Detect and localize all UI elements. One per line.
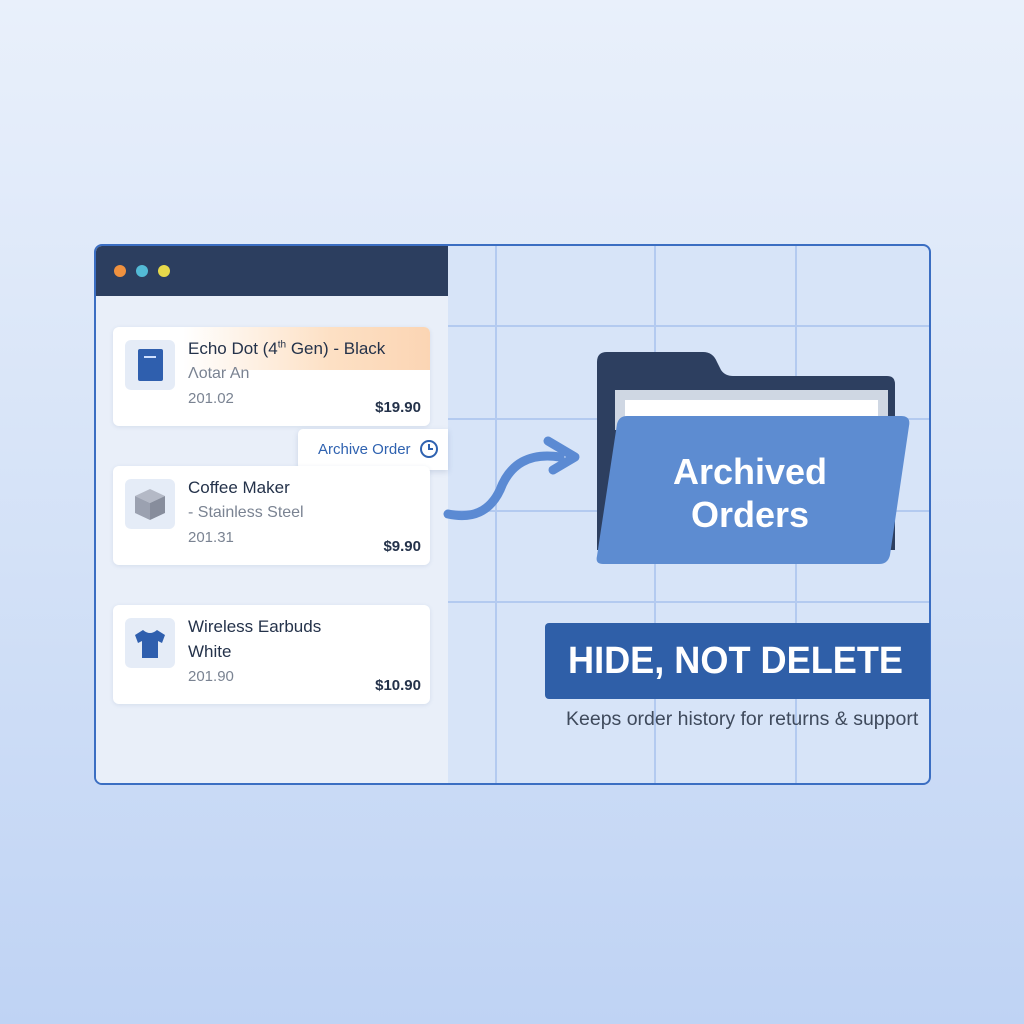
left panel (96, 246, 448, 787)
banner: HIDE, NOT DELETE (545, 623, 930, 699)
card: Coffee Maker: - Stainless Steel (188, 504, 304, 521)
icon: cube (125, 479, 175, 529)
card: Echo Dot: $19.90 (375, 399, 421, 416)
arrow (444, 436, 580, 520)
card: Echo Dot: Echo Dot (4th Gen) - Black (188, 339, 385, 358)
folder: Archived Orders: Archived Orders (673, 451, 827, 535)
window header bar (96, 246, 448, 296)
card: Coffee Maker: $9.90 (383, 538, 421, 555)
window frame (94, 244, 931, 785)
archive order button: Archive Order (318, 441, 411, 458)
card: Wireless Earbuds: Wireless Earbuds (188, 617, 321, 636)
card: Coffee Maker: Coffee Maker (188, 478, 290, 497)
card: Wireless Earbuds: 201.90 (188, 668, 234, 685)
grid background (448, 246, 929, 783)
banner: HIDE, NOT DELETE: HIDE, NOT DELETE (568, 640, 903, 682)
card: Wireless Earbuds: $10.90 (375, 677, 421, 694)
card: Echo Dot: 201.02 (188, 390, 234, 407)
card: Wireless Earbuds (113, 605, 430, 704)
archive order button (298, 429, 448, 470)
icon: book (125, 340, 175, 390)
card: Wireless Earbuds: White (188, 642, 231, 661)
icon: t-shirt (125, 618, 175, 668)
folder: Archived Orders (596, 352, 910, 564)
card: Echo Dot: Λotar An (188, 365, 249, 382)
card: Echo Dot (113, 327, 430, 426)
subtitle: Keeps order history for returns & support (566, 708, 918, 730)
card: Coffee Maker: 201.31 (188, 529, 234, 546)
icon: clock (420, 440, 438, 458)
card: Coffee Maker (113, 466, 430, 565)
